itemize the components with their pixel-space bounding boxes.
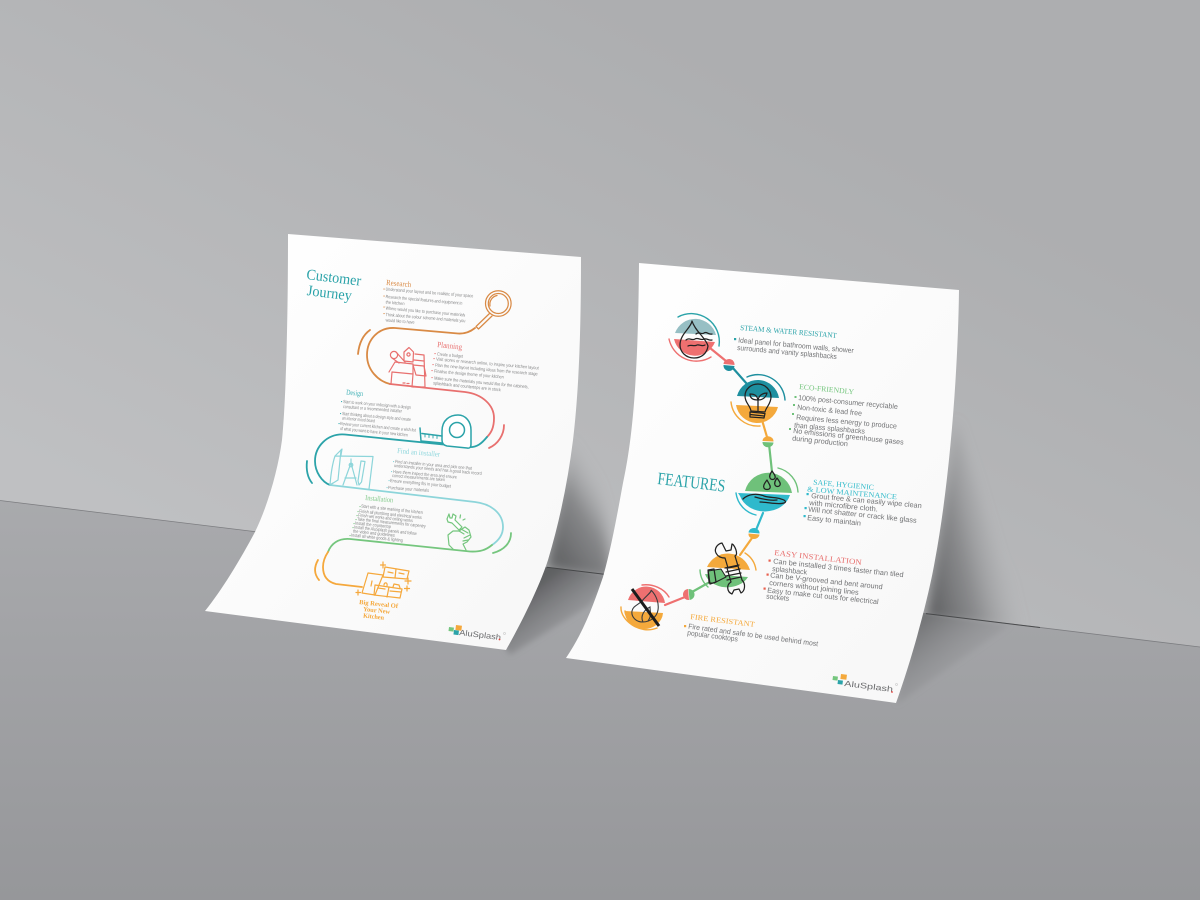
block: Design: Start to work on your redesign with a design <box>343 399 411 410</box>
journey route line <box>307 328 511 587</box>
block: Find an installer: understands your needs and has a good track record <box>394 463 482 476</box>
block: Safe, hygienic and low maintenance: SAFE, HYGIENIC <box>813 478 874 492</box>
block: Research: Research the special features and equipment in <box>385 294 463 306</box>
block: Safe, hygienic and low maintenance: Grout free & can easily wipe clean <box>811 491 922 510</box>
block: Design: Review your current kitchen and create a wish list <box>340 421 417 433</box>
block: Safe, hygienic and low maintenance <box>804 478 922 528</box>
block: Research <box>384 278 474 325</box>
block: Planning: Finalise the design theme of your kitchen <box>434 369 504 380</box>
block: Easy installation: Can be installed 3 times faster than tiled <box>773 557 904 579</box>
block: Installation: Take the final measurements for carpentry <box>357 517 427 529</box>
block: Easy installation: EASY INSTALLATION <box>774 548 863 567</box>
block: Research: the kitchen <box>385 300 405 306</box>
block: Easy installation: Easy to make cut outs for electrical <box>767 586 879 606</box>
icon: tape measure <box>420 415 471 448</box>
background: floor <box>0 500 1200 900</box>
block: Planning: Planning <box>437 340 463 352</box>
block: Eco-friendly: No emissions of greenhouse gases <box>793 426 904 447</box>
block: Easy installation <box>764 548 904 606</box>
icon: blueprint with compass and pencil <box>330 449 373 489</box>
title: Customer Journey: Journey <box>306 283 353 305</box>
panel: customer journey sheet <box>205 234 581 650</box>
block: Big Reveal Of Your New Kitchen <box>359 599 399 622</box>
block: Eco-friendly: Non-toxic & lead free <box>797 403 862 418</box>
block: Easy installation: Can be V-grooved and bent around <box>770 571 883 591</box>
block: Big Reveal Of Your New Kitchen: Big Reveal Of <box>359 599 399 610</box>
shadow: first sheet on wall <box>546 460 612 574</box>
block: Research: would like to have <box>385 318 415 325</box>
block: Steam and water resistant: STEAM & WATER RESISTANT <box>740 323 838 340</box>
block: Installation: Finish wet works and ceiling works <box>358 513 414 523</box>
block: Big Reveal Of Your New Kitchen: Your New <box>363 606 391 616</box>
block: Find an installer: Have them inspect the area and ensure <box>393 469 457 480</box>
logo: AluSplash right sheet <box>833 674 898 694</box>
logo: AluSplash right sheet: AluSplash <box>844 679 893 694</box>
panel: features sheet <box>566 263 959 703</box>
block: Installation: the video and guidelines <box>353 529 396 538</box>
block: Installation: Start with a site marking of the kitchen <box>361 504 423 515</box>
title: Customer Journey: Customer <box>306 267 362 290</box>
block: Design: of what you want to have in your new kitchen <box>340 426 408 438</box>
block: Planning: Make sure the materials you would like for the cabinets, <box>434 376 529 389</box>
block: Planning: Plan the new layout including ideas from the research stage <box>435 363 538 377</box>
icon: finished kitchen <box>356 562 411 598</box>
icon: steam and water <box>669 314 719 361</box>
block: Installation <box>350 493 427 543</box>
block: Find an installer: Find an installer in your area and pick one that <box>395 459 473 471</box>
block: Eco-friendly <box>789 382 904 448</box>
block: Find an installer: Purchase your materials <box>388 485 430 493</box>
block: Installation: Finish all plumbing and electrical works <box>359 509 423 520</box>
connector timeline <box>665 348 774 605</box>
block: Design: Design <box>346 388 364 398</box>
block: Easy installation: splashback <box>772 564 808 577</box>
icon: wrench in hand <box>700 543 756 594</box>
block: Easy installation: corners without joining lines <box>769 578 860 597</box>
shadow: second sheet on floor <box>901 614 998 696</box>
block: Research: Where would you like to purchase your materials <box>385 306 466 318</box>
block: Easy installation: sockets <box>766 592 790 603</box>
block: Find an installer: correct measurements are taken <box>392 473 445 482</box>
block: Eco-friendly: 100% post-consumer recyclable <box>798 393 898 411</box>
block: Design: Start thinking about a design style and create <box>342 411 411 422</box>
icon: eco light bulb <box>731 375 785 426</box>
block: Eco-friendly: ECO-FRIENDLY <box>799 382 855 396</box>
logo: AluSplash left sheet: AluSplash <box>459 628 502 642</box>
heading: FEATURES: FEATURES <box>657 468 726 496</box>
block: Eco-friendly: Requires less energy to produce <box>796 413 897 431</box>
logo: AluSplash left sheet <box>449 625 506 642</box>
icon: safe hygienic hand and drops <box>736 468 798 515</box>
background: wall <box>0 0 1200 650</box>
block: Find an installer: Find an installer <box>397 446 441 459</box>
block: Installation: Installation <box>365 493 394 504</box>
block: Fire resistant: Fire rated and safe to be used behind most <box>688 622 819 648</box>
block: Design: an interior mood board <box>342 416 375 423</box>
block: Safe, hygienic and low maintenance: & LOW MAINTENANCE <box>807 485 898 501</box>
block: Research: Understand your layout and be realistic of your space <box>385 287 474 298</box>
block: Installation: Install the AluSplash panels and follow <box>354 525 418 536</box>
block: Planning: Create a budget <box>437 352 464 359</box>
block: Find an installer: Ensure everything fits in your budget <box>390 478 452 489</box>
block: Safe, hygienic and low maintenance: Will not shatter or crack like glass <box>808 505 917 525</box>
block: Planning <box>432 340 540 392</box>
block: Planning: Visit stores or research online, to inspire your kitchen layout <box>436 357 540 371</box>
block: Steam and water resistant: Ideal panel for bathroom walls, shower <box>738 336 855 355</box>
block: Steam and water resistant: surrounds and vanity splashbacks <box>737 343 838 361</box>
block: Fire resistant <box>684 612 819 648</box>
icon: hand holding wrench <box>447 514 471 550</box>
title: Customer Journey <box>306 267 362 305</box>
icon: magnifying glass <box>476 291 511 329</box>
block: Research: Think about the colour scheme and materials you <box>385 312 466 323</box>
block: Fire resistant: popular cooktops <box>687 628 739 644</box>
block: Find an installer <box>386 446 482 493</box>
block: Installation: Install all white goods & lighting <box>351 533 403 543</box>
block: Design <box>338 388 417 438</box>
block: Installation: Install the countertop <box>355 521 392 529</box>
block: Eco-friendly: during production <box>792 434 848 448</box>
block: Eco-friendly: than glass splashbacks <box>794 421 866 436</box>
shadow: second sheet on wall <box>924 439 1008 622</box>
block: Safe, hygienic and low maintenance: with microfibre cloth. <box>808 498 878 514</box>
icon: fire with slash <box>621 585 669 630</box>
shadow: first sheet on floor <box>506 567 604 654</box>
icon: box of supplies <box>389 348 426 387</box>
block: Research: Research <box>386 278 412 289</box>
block: Design: consultant or a recommended installer <box>343 404 402 414</box>
block: Planning: splashback and countertops are in stock <box>433 381 502 392</box>
block: Steam and water resistant <box>734 323 855 361</box>
block: Big Reveal Of Your New Kitchen: Kitchen <box>363 613 385 622</box>
block: Fire resistant: FIRE RESISTANT <box>690 612 756 629</box>
block: Safe, hygienic and low maintenance: Easy to maintain <box>807 513 861 528</box>
